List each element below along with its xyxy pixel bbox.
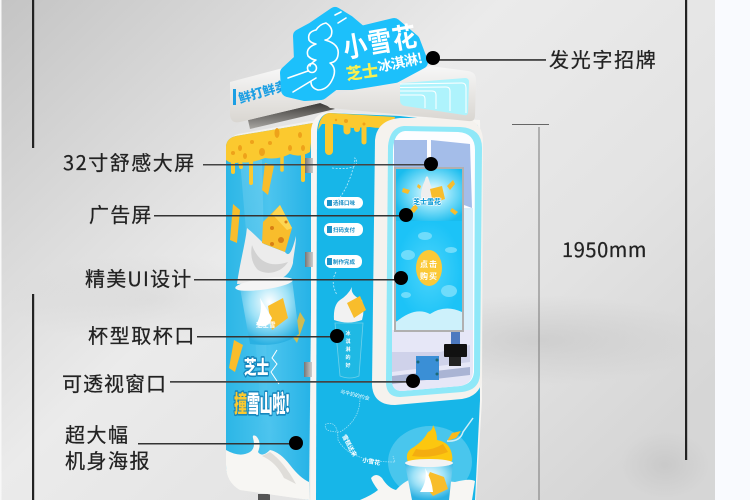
left sign box: 鲜打鲜卖: [236, 75, 290, 107]
handwritten text and flow line: [325, 388, 395, 467]
callout: cup outlet: 杯型取杯口: [88, 320, 196, 349]
roof glow panel: [400, 78, 469, 115]
dashed flow path top: [332, 158, 357, 295]
handwritten text and flow line: 小雪花: [362, 455, 381, 467]
callout: cup outlet: [88, 320, 344, 349]
step pills: 制作完成: [333, 258, 356, 266]
step pills: 选择口味: [333, 199, 356, 207]
step pills: 扫码支付: [333, 226, 356, 234]
ice cream cup bottom: [360, 418, 475, 500]
cup outline: 好: [345, 362, 351, 369]
slogan doodle: [271, 350, 279, 384]
step pills: [324, 197, 363, 268]
header: [230, 12, 476, 129]
buy button: [416, 250, 442, 286]
callout: sign: [426, 44, 658, 73]
hinges: [304, 158, 313, 377]
callout: body poster: 机身海报: [65, 445, 151, 474]
panel: front body: [304, 112, 482, 500]
milk wave: [226, 435, 309, 500]
callout: 32 inch screen: [63, 147, 438, 176]
vertical rule left top: [32, 0, 34, 148]
roof right box: [320, 66, 476, 121]
panel: side poster: [226, 120, 316, 500]
milk splash and cup: 芝士雪: [256, 319, 276, 329]
callout: body poster: 超大幅: [65, 419, 130, 448]
callout: ad screen: [89, 199, 413, 228]
window interior: [392, 131, 475, 391]
window bezel: [372, 118, 483, 405]
screen ice cream: [402, 176, 458, 215]
foot: [258, 494, 270, 500]
callout: UI design: 精美UI设计: [85, 263, 192, 292]
slogan: 雪山啦!: [247, 386, 290, 419]
callout: window: [62, 368, 420, 397]
buy button: 购买: [420, 271, 438, 282]
callout: sign: 发光字招牌: [549, 44, 658, 73]
left sign box: [230, 68, 320, 122]
cheese pieces: [229, 163, 305, 372]
yellow drips: [318, 113, 395, 151]
light-up logo sign: 冰淇淋!: [376, 48, 424, 77]
under roof shadow: [248, 103, 335, 129]
callout: 32 inch screen: 32寸舒感大屏: [63, 147, 196, 176]
light-up logo sign: [287, 12, 424, 94]
handwritten text and flow line: 雪糕送来: [340, 433, 359, 458]
cone ice cream: [334, 287, 366, 322]
vertical rule right: [685, 0, 687, 460]
screen ice cream: 芝士雪花: [413, 197, 441, 207]
callout: ad screen: 广告屏: [89, 199, 153, 228]
yellow cheese top: [226, 123, 313, 183]
cup outline: 的: [345, 354, 351, 361]
height dimension: 1950mm: [562, 234, 647, 263]
slogan: 芝士: [244, 353, 269, 380]
cup outline: 淋: [345, 346, 351, 353]
machine: [226, 12, 483, 500]
callout: body poster: [65, 419, 303, 474]
dispenser parts: [416, 356, 439, 380]
touch screen: [394, 167, 464, 332]
slogan: [234, 353, 290, 419]
light-up logo sign: 小雪花: [340, 14, 420, 66]
callout: window: 可透视窗口: [62, 368, 167, 397]
vertical rule left bottom: [32, 294, 34, 500]
callout: UI design: [85, 263, 408, 292]
slogan: 撞: [234, 386, 247, 419]
cup outline: 冰: [345, 330, 351, 337]
cup outline: 淇: [345, 338, 351, 345]
handwritten text and flow line: 与牛奶的约会: [340, 388, 370, 402]
cup outline: [335, 323, 363, 378]
buy button: 点击: [420, 259, 438, 270]
light-up logo sign: 芝士: [344, 57, 379, 85]
milk splash and cup: [235, 205, 299, 345]
neon ice cream icon: [288, 12, 346, 92]
